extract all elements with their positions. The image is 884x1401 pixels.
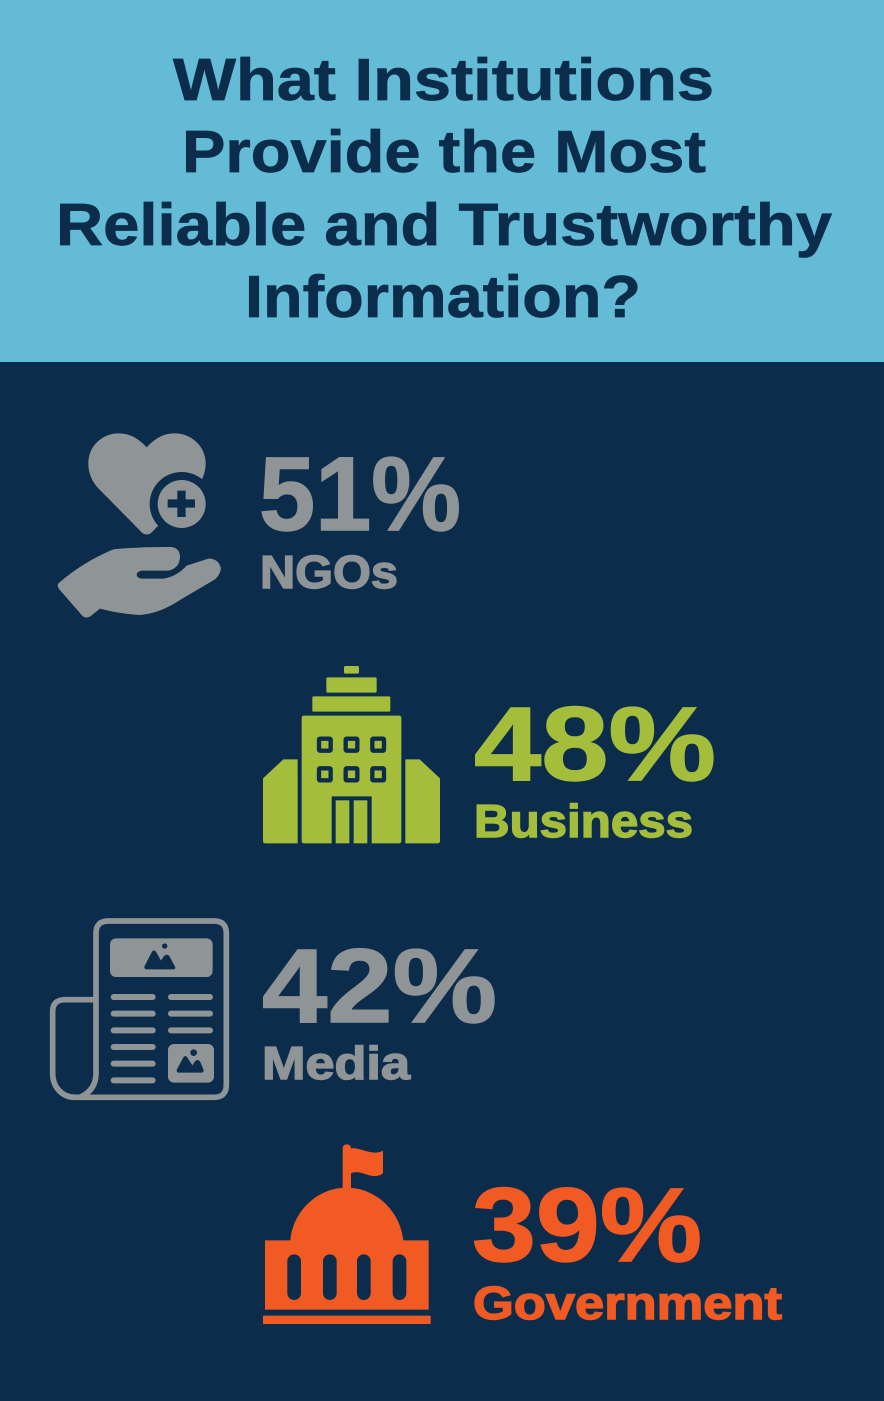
stat: Business 48%: 48%	[474, 686, 716, 803]
stat: Media 42%: 42%	[262, 928, 497, 1045]
icon: office building	[263, 666, 440, 843]
stat: Business 48%: Business	[474, 795, 693, 847]
title	[56, 47, 832, 330]
title: Provide the Most	[182, 119, 706, 185]
stat: NGOs 51%: NGOs	[260, 546, 398, 598]
icon: government capitol building	[263, 1144, 431, 1324]
stat: Government 39%: 39%	[472, 1167, 702, 1284]
stat: Government 39%: Government	[473, 1277, 782, 1329]
stat: NGOs 51%: 51%	[259, 436, 461, 553]
icon: newspaper	[53, 921, 226, 1097]
title: What Institutions	[173, 47, 714, 113]
stat: Business 48%	[474, 686, 716, 847]
header panel	[0, 0, 884, 362]
icon: heart in hand	[58, 433, 221, 618]
title: Information?	[245, 264, 641, 330]
stat: Media 42%: Media	[262, 1037, 410, 1089]
stat: Media 42%	[262, 928, 497, 1089]
stat: Government 39%	[472, 1167, 782, 1329]
title: Reliable and Trustworthy	[56, 192, 832, 258]
